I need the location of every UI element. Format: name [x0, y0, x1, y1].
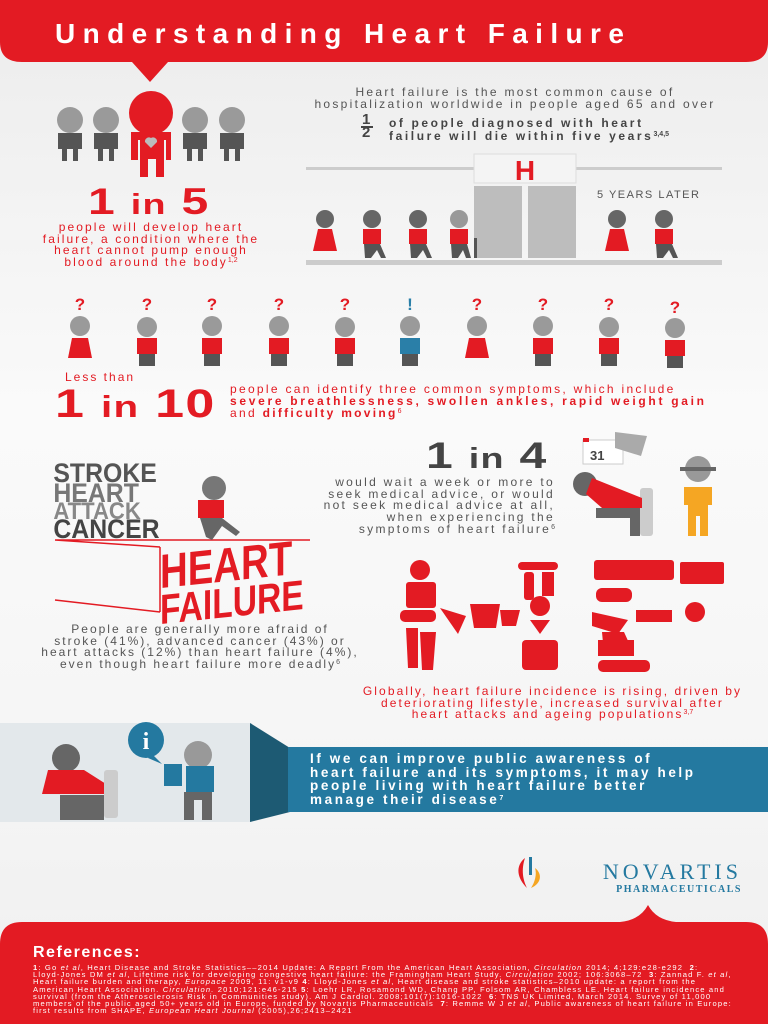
icon: waiting patient with calendar and doctor [573, 432, 716, 536]
stat: less than 1 in 10: 1 in 10 [55, 382, 216, 426]
references text [33, 963, 732, 1015]
text: symptoms: and difficulty moving6 [230, 406, 402, 420]
text: hospitalization: hospitalization worldwide in people aged 65 and over [314, 97, 716, 111]
header banner [0, 0, 768, 82]
stat: half die within five years: of people diagnosed with heart [389, 116, 644, 130]
text: symptoms [230, 382, 707, 420]
references text: American Heart Association. Circulation. 2010;121:e46-215 5: Loehr LR, Rosamond WD, Chang PP, Folsom AR, Chambless LE. Heart failure incidence and [33, 985, 725, 994]
text: afraid of: even though heart failure more deadly6 [60, 657, 340, 671]
text: awareness message: If we can improve public awareness of [310, 751, 652, 766]
label: 5 years later: 5 YEARS LATER [597, 189, 700, 201]
text: awareness message [310, 751, 696, 807]
text: incidence rising [363, 684, 742, 721]
stroke / heart attack / cancer vs heart failure illustration: ATTACK [53, 497, 141, 524]
icon: group of people with red highlighted person [57, 91, 245, 177]
stroke / heart attack / cancer vs heart failure illustration: FAILURE [160, 573, 304, 634]
title: Understanding Heart Failure [55, 18, 631, 49]
row of ten people with question marks: ? [142, 295, 152, 314]
stat: less than 1 in 10: Less than [65, 370, 135, 384]
stat: 1 in 4: 1 in 4 [426, 435, 548, 476]
references text: Lloyd-Jones DM et al, Lifetime risk for developing congestive heart failure: the Framingham Heart Study. Circulation 2002; 106:3068–72 3: Zannad F. et al, [33, 970, 732, 979]
row of ten people with question marks: ? [670, 298, 680, 317]
text: 1 in 4 description: would wait a week or more to [335, 475, 555, 489]
text: 1 in 4 description: symptoms of heart failure6 [359, 522, 555, 536]
row of ten people with question marks: ? [340, 295, 350, 314]
text: incidence rising: Globally, heart failure incidence is rising, driven by [363, 684, 742, 698]
HF lifestyle icons [400, 560, 724, 672]
Novartis logo [518, 857, 540, 888]
stat: 1 in 5: 1 in 5 [88, 181, 210, 222]
text: 1 in 5 description: heart cannot pump enough [54, 243, 248, 257]
references text: members of the public aged 50+ years old in Europe, funded by Novartis Pharmaceuticals 7: Remme W J et al, Public awareness of heart failure in Europe: [33, 999, 732, 1008]
references heading: References: [33, 944, 141, 961]
text: awareness message: people living with heart failure better [310, 778, 647, 793]
stroke / heart attack / cancer vs heart failure illustration [53, 459, 310, 634]
stat: half die within five years [361, 111, 669, 142]
text: hospitalization: Heart failure is the most common cause of [355, 85, 675, 99]
text: 1 in 5 description [42, 220, 259, 269]
text: incidence rising: deteriorating lifestyle, increased survival after [381, 696, 724, 710]
references text: 1: Go et al, Heart Disease and Stroke Statistics––2014 Update: A Report From the American Heart Association, Circulation 2014; 4;129:e28-e292 2: [33, 963, 698, 972]
row of ten people with question marks: ? [472, 295, 482, 314]
row of ten people with question marks: ? [604, 295, 614, 314]
awareness banner [0, 722, 768, 822]
awareness banner: i [143, 729, 150, 755]
Novartis wordmark: PHARMACEUTICALS [616, 884, 742, 895]
row of ten people with question marks [68, 295, 685, 368]
stat: half die within five years: 2 [362, 124, 370, 141]
text: 1 in 4 description: not seek medical advice at all, [324, 498, 555, 512]
hospital scene: H [515, 155, 535, 186]
references text: Heart failure burden and therapy, Europace 2009, 11: v1-v9 4: Lloyd-Jones et al, Heart disease and stroke statistics–2010 update: a report from the [33, 977, 696, 986]
stroke / heart attack / cancer vs heart failure illustration: HEART [53, 479, 139, 508]
text: afraid of: stroke (41%), advanced cancer (43%) or [54, 634, 346, 648]
text: afraid of: heart attacks (12%) than heart failure (4%), [41, 645, 359, 659]
stroke / heart attack / cancer vs heart failure illustration: CANCER [53, 515, 160, 544]
text: hospitalization [314, 85, 716, 111]
row of ten people with question marks: ? [538, 295, 548, 314]
references text: survival (from the Atherosclerosis Risk in Communities study). Am J Cardiol. 2008;101(7):1016-1022 6: TNS UK Limited, March 2014. Survey of 11,000 [33, 992, 711, 1001]
stat: half die within five years: 1 [362, 111, 370, 128]
text: 1 in 5 description: failure, a condition where the [43, 232, 259, 246]
text: afraid of: People are generally more afraid of [71, 622, 329, 636]
stroke / heart attack / cancer vs heart failure illustration: HEART [160, 532, 293, 599]
row of ten people with question marks: ? [75, 295, 85, 314]
row of ten people with question marks: ? [274, 295, 284, 314]
text: 1 in 5 description: people will develop heart [59, 220, 243, 234]
Novartis wordmark: NOVARTIS [603, 859, 742, 884]
text: awareness message: heart failure and its symptoms, it may help [310, 765, 696, 780]
references text: first results from SHAPE, European Heart Journal (2005),26;2413–2421 [33, 1006, 353, 1015]
text: 1 in 5 description: blood around the body1,2 [64, 255, 238, 269]
row of ten people with question marks: ? [207, 295, 217, 314]
text: awareness message: manage their disease7 [310, 792, 503, 807]
hospital scene [306, 154, 722, 265]
row of ten people with question marks: ! [407, 295, 413, 314]
stat: half die within five years: failure will die within five years3,4,5 [389, 128, 669, 142]
text: 1 in 4 description: seek medical advice, or would [328, 487, 555, 501]
text: symptoms: people can identify three common symptoms, which include [230, 382, 676, 396]
text: incidence rising: heart attacks and ageing populations3,7 [412, 707, 693, 721]
text: 1 in 4 description: when experiencing the [387, 510, 555, 524]
icon: waiting patient with calendar and doctor: 31 [590, 448, 604, 463]
text: 1 in 4 description [324, 475, 555, 536]
references panel [0, 905, 768, 1024]
Novartis wordmark [603, 859, 742, 895]
text: afraid of [41, 622, 359, 671]
text: symptoms: severe breathlessness, swollen ankles, rapid weight gain [230, 394, 707, 408]
stroke / heart attack / cancer vs heart failure illustration: STROKE [53, 459, 157, 488]
